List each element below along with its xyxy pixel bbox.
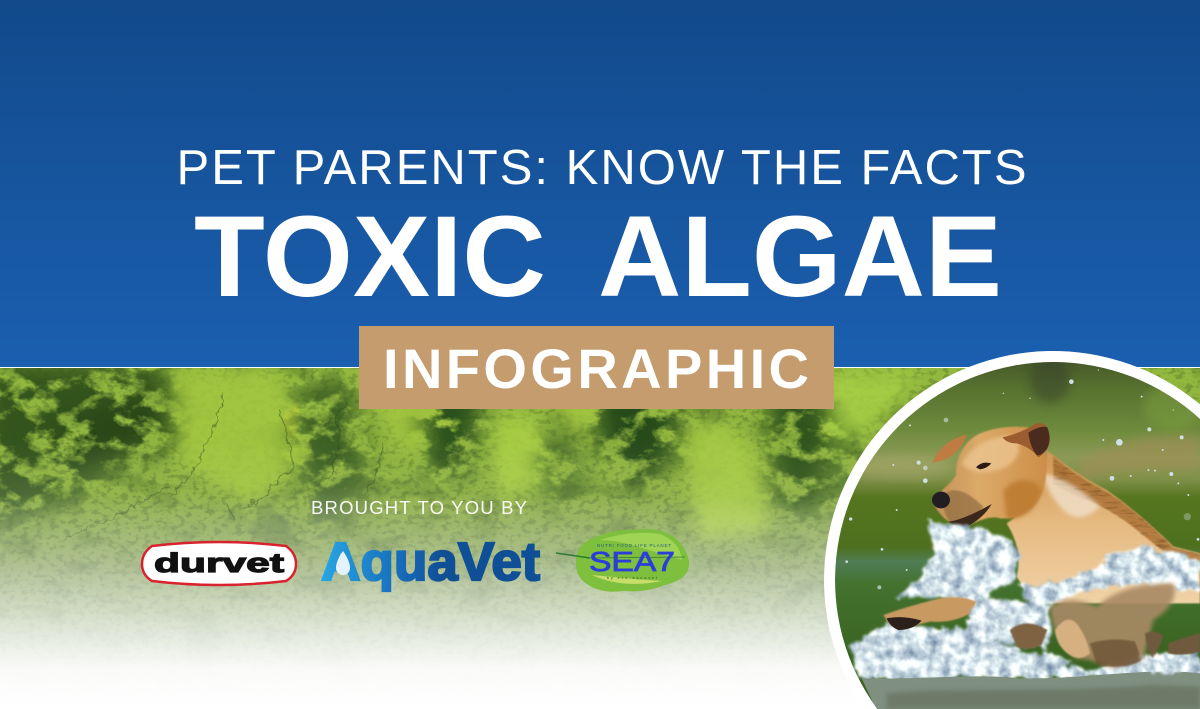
dog near ear xyxy=(1003,423,1050,457)
photo: circular dog in splashing water xyxy=(820,350,1200,709)
heading: main title: TOXIC xyxy=(194,193,546,321)
river surface xyxy=(862,671,1200,709)
splashing water mass xyxy=(898,520,1018,603)
algae fade to white xyxy=(0,440,1200,709)
dog muzzle mouth xyxy=(948,504,992,527)
photo white ring xyxy=(824,351,1200,709)
header band: blue gradient xyxy=(0,0,1200,367)
text: brought to you by: BROUGHT TO YOU BY xyxy=(311,497,527,518)
dog head xyxy=(933,427,1047,527)
dog body xyxy=(1007,450,1200,603)
heading: main title: ALGAE xyxy=(598,193,1002,321)
badge: infographic xyxy=(359,326,834,409)
logo: SEA7 leaf: by eco-aquavet xyxy=(607,576,657,580)
dog far ear xyxy=(932,434,967,463)
dog second leg xyxy=(1050,583,1175,668)
water droplets xyxy=(845,369,1199,589)
logo: SEA7 leaf: NUTRI FOOD LIFE PLANET xyxy=(597,543,671,548)
heading: main title xyxy=(194,193,1002,321)
logo: Durvet: durvet xyxy=(154,548,284,578)
logo: AquaVet: AquaVet xyxy=(321,532,540,592)
heading: kicker line: PET PARENTS: KNOW THE FACTS xyxy=(176,141,1026,195)
dog eye xyxy=(976,463,991,469)
logo: SEA7 leaf: SEA7 xyxy=(589,546,675,577)
blurred green background xyxy=(820,350,1200,709)
logo: SEA7 leaf xyxy=(556,529,689,592)
badge: infographic: INFOGRAPHIC xyxy=(383,337,809,400)
logo: Durvet xyxy=(142,542,296,585)
dog nose xyxy=(932,492,950,508)
icon: water drop xyxy=(336,551,350,575)
background: green algae texture xyxy=(0,368,1200,668)
water foam foreground xyxy=(967,610,1200,675)
dog front leg xyxy=(883,597,977,628)
